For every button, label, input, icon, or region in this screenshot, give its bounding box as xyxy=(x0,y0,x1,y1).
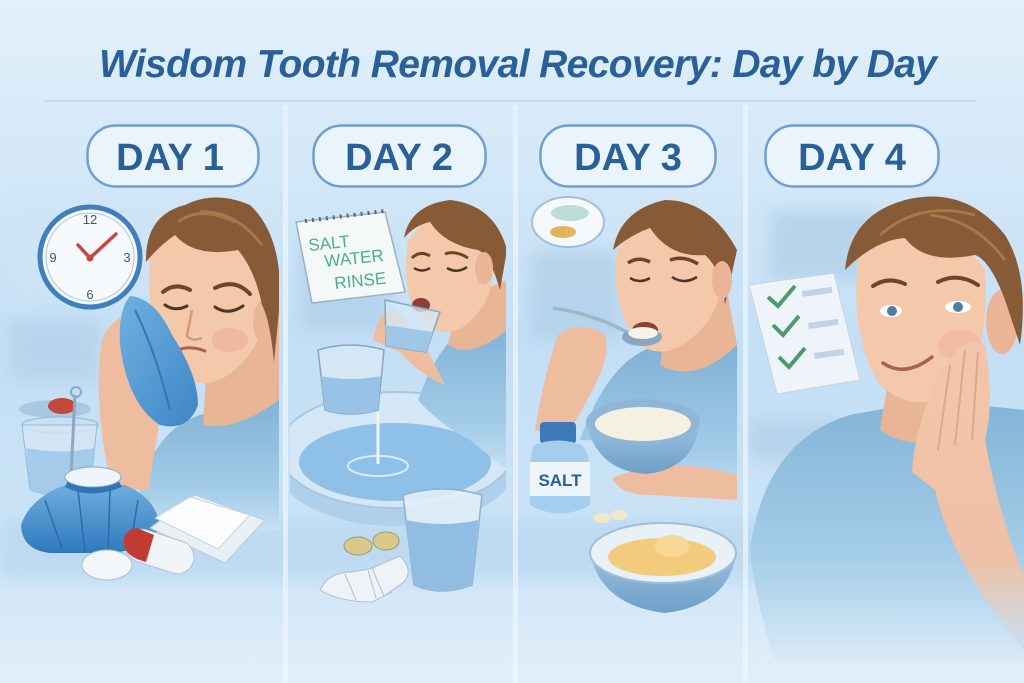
bowl of porridge xyxy=(586,399,700,474)
title: Wisdom Tooth Removal Recovery: Day by Day xyxy=(99,43,939,86)
bowl of mashed food xyxy=(590,523,736,613)
day 2 badge xyxy=(314,126,486,186)
notepad: salt water rinse: SALT xyxy=(307,232,350,255)
day 3 badge: DAY 3 xyxy=(574,137,682,179)
salt bottle: SALT xyxy=(538,471,582,490)
person drinking xyxy=(373,200,507,470)
day 4 badge xyxy=(766,126,938,186)
notepad: salt water rinse: WATER xyxy=(323,246,385,271)
gauze roll xyxy=(320,556,408,602)
glass of water xyxy=(403,489,482,591)
glass with spoon xyxy=(22,387,98,495)
tablets xyxy=(593,510,627,523)
smiling person xyxy=(750,197,1024,660)
divider xyxy=(283,105,288,683)
panel: day 1 xyxy=(19,126,281,580)
salt bottle xyxy=(530,422,590,514)
checklist xyxy=(749,273,860,394)
tablets xyxy=(344,532,399,555)
icon: wall clock: 6 xyxy=(86,287,94,302)
icon: wall clock: 9 xyxy=(49,250,57,265)
icon: wall clock: 3 xyxy=(123,250,131,265)
panel: day 3 xyxy=(530,126,737,613)
day 3 badge xyxy=(540,126,716,186)
day 1 badge xyxy=(88,126,258,186)
pill tray xyxy=(19,398,91,418)
person with ice pack xyxy=(99,198,281,530)
divider xyxy=(743,105,748,683)
icon: wall clock: 12 xyxy=(83,212,97,227)
person eating xyxy=(535,200,737,500)
notepad: salt water rinse: RINSE xyxy=(333,269,387,293)
day 4 badge: DAY 4 xyxy=(798,137,906,179)
notepad: salt water rinse xyxy=(296,211,405,303)
day 2 badge: DAY 2 xyxy=(345,137,453,179)
pills xyxy=(82,525,198,580)
day 1 badge: DAY 1 xyxy=(116,137,224,179)
ice pack on cheek xyxy=(120,296,198,426)
divider xyxy=(513,105,518,683)
basin xyxy=(290,391,506,526)
plate with food xyxy=(532,197,604,247)
glass pouring xyxy=(318,345,384,414)
gauze pads xyxy=(150,495,265,563)
panel: day 4 xyxy=(749,126,1024,660)
icon: wall clock xyxy=(40,207,140,307)
panel: day 2 xyxy=(290,124,506,602)
ice pack bag xyxy=(21,467,160,553)
